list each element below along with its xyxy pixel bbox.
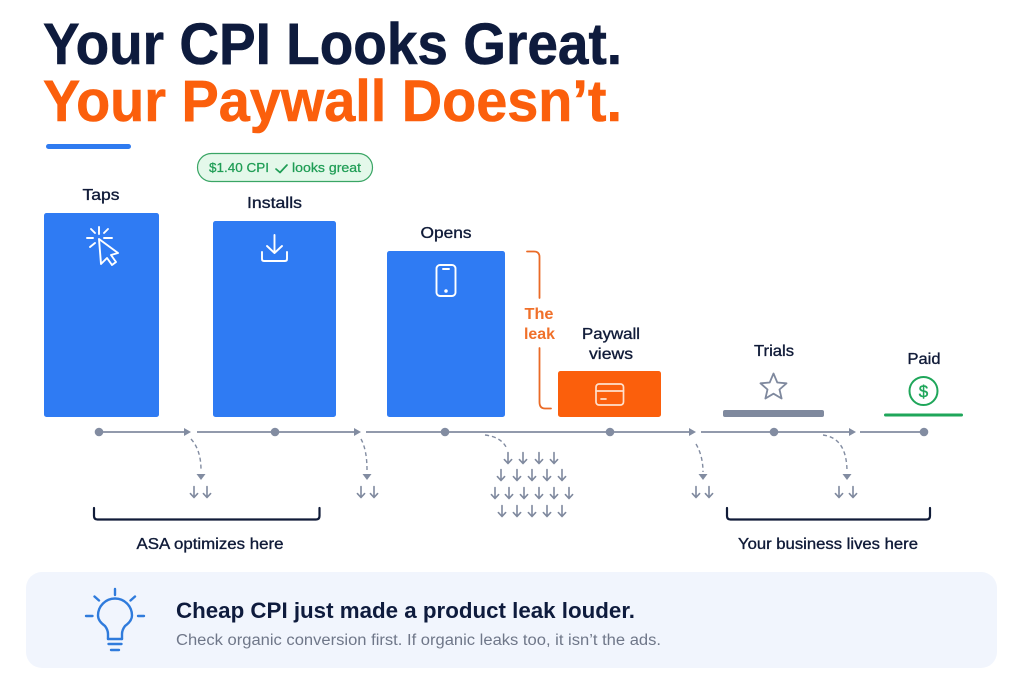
icon: download (262, 235, 287, 261)
stage: paywall views: Paywall (582, 326, 640, 343)
the leak bracket: The (524, 306, 554, 323)
stage: trials (723, 343, 824, 417)
icon: card (596, 384, 624, 405)
stage: installs: Installs (247, 195, 302, 212)
drop-off: after paywall views (692, 444, 713, 498)
icon: light bulb (86, 589, 144, 650)
drop-off: after trials (823, 435, 857, 498)
stage: taps (44, 187, 159, 417)
stage: paid (884, 351, 963, 416)
stage: opens (387, 225, 505, 417)
bracket: ASA optimizes here: ASA optimizes here (136, 536, 284, 553)
callout: CPI pill: looks great (292, 160, 361, 175)
stage: paywall views: views (589, 346, 633, 363)
icon: star (760, 374, 786, 398)
panel: takeaway (26, 572, 997, 668)
stage: trials: Trials (754, 343, 794, 360)
stage: installs (213, 195, 336, 417)
icon: dollar: $ (919, 382, 929, 401)
flow timeline (95, 428, 928, 436)
title: Your Paywall Doesn’t. (43, 69, 622, 134)
title (43, 12, 622, 134)
stage: paywall views (558, 326, 661, 417)
bracket: your business lives here: Your business lives here (738, 536, 918, 553)
title: Your CPI Looks Great. (43, 12, 622, 77)
icon: phone (436, 265, 456, 296)
stage: opens: Opens (420, 225, 472, 242)
icon: tap cursor (87, 227, 118, 265)
bracket: your business lives here (727, 508, 930, 553)
callout: CPI pill: $1.40 CPI (209, 160, 269, 175)
drop-off: the leak, many arrows (485, 435, 573, 516)
drop-off: after taps (190, 439, 211, 498)
the leak bracket: leak (524, 326, 555, 343)
takeaway detail: Check organic conversion first. If organic leaks too, it isn’t the ads. (176, 632, 661, 649)
title accent rule (46, 144, 131, 149)
the leak bracket (524, 252, 555, 408)
drop-off: after installs (357, 439, 378, 498)
stage: paid: Paid (908, 351, 940, 368)
bracket: ASA optimizes here (94, 508, 320, 553)
callout: CPI pill (198, 154, 372, 182)
takeaway headline: Cheap CPI just made a product leak louder. (176, 598, 635, 623)
stage: taps: Taps (82, 187, 120, 204)
